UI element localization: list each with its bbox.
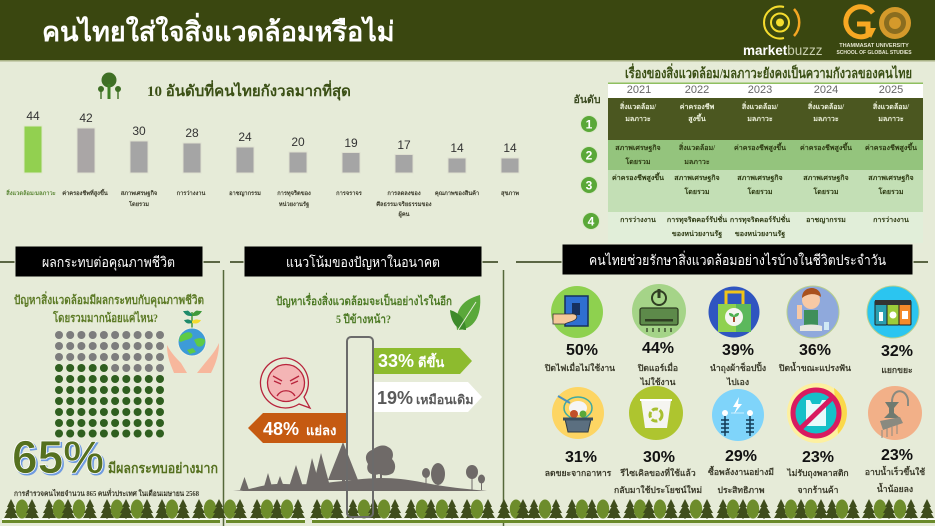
heading: daily actions: คนไทยช่วยรักษาสิ่งแวดล้อมอย่างไรบ้างในชีวิตประจำวัน: [589, 251, 886, 269]
action 3: reusable bag: ไปเอง: [726, 377, 749, 387]
logo: marketbuzzz: marketbuzzz: [743, 43, 823, 58]
question: future trend: ปัญหาเรื่องสิ่งแวดล้อมจะเป็นอย่างไรในอีก: [276, 292, 452, 308]
action 6: reduce food waste: [545, 387, 612, 478]
action 4: brushing teeth: [779, 286, 851, 373]
action 7: recycling: รีไซเคิลของที่ใช้แล้ว: [620, 466, 696, 478]
table: ranking by year: ของหน่วยงานรัฐ: [672, 229, 722, 239]
logo: Thammasat GO: SCHOOL OF GLOBAL STUDIES: [836, 50, 912, 56]
arrow: better 33%: 33%: [378, 351, 414, 371]
table: ranking by year: ค่าครองชีพสูงขึ้น: [800, 141, 852, 153]
table: ranking by year: การทุจริตคอร์รัปชั่น: [667, 214, 727, 224]
action 3: reusable bag: 39%: [722, 342, 754, 359]
action 8: efficient energy: ซื้อพลังงานอย่างมี: [708, 465, 774, 477]
bar chart: top 10 worries: โดยรวม: [128, 200, 149, 208]
action 9: no plastic bags: จากร้านค้า: [798, 485, 839, 495]
action 10: short showers: อาบน้ำเร็วขึ้นใช้: [865, 465, 925, 477]
action 9: no plastic bags: ไม่รับถุงพลาสติก: [786, 468, 849, 479]
action 10: short showers: น้ำน้อยลง: [877, 482, 913, 494]
table: ranking by year: สภาพเศรษฐกิจ: [803, 174, 849, 183]
big number: 65%: 65%: [12, 431, 104, 483]
table: ranking by year: สภาพเศรษฐกิจ: [615, 144, 661, 153]
header band: [0, 0, 935, 62]
table: ranking by year: ค่าครองชีพสูงขึ้น: [734, 141, 786, 153]
bar chart: top 10 worries: ค่าครองชีพที่สูงขึ้น: [62, 188, 108, 198]
table: ranking by year: มลภาวะ: [625, 115, 651, 123]
table: ranking by year: โดยรวม: [877, 187, 904, 196]
table: ranking by year: มลภาวะ: [878, 115, 904, 123]
action 3: reusable bag: [708, 286, 766, 387]
table: ranking by year: สูงขึ้น: [688, 112, 706, 124]
arrow: better 33%: ดีขึ้น: [418, 352, 444, 370]
bar chart: top 10 worries: ผู้คน: [398, 210, 410, 219]
bar chart: top 10 worries: สภาพเศรษฐกิจ: [121, 190, 157, 197]
bar chart: top 10 worries: 42: [79, 111, 93, 125]
action 6: reduce food waste: ลดขยะจากอาหาร: [545, 468, 612, 478]
action 2: air conditioner off: ปิดแอร์เมื่อ: [638, 361, 678, 373]
table: ranking by year: สิ่งแวดล้อม/: [872, 101, 910, 111]
text: big impact: มีผลกระทบอย่างมาก: [108, 461, 218, 477]
rank circles: [580, 116, 600, 230]
bar chart: top 10 worries: การทุจริตของ: [277, 190, 311, 197]
icon: leaf: [450, 295, 480, 330]
bar chart: top 10 worries: 24: [238, 130, 252, 144]
heading: daily actions: [562, 244, 913, 275]
bar chart: top 10 worries: 20: [291, 135, 305, 149]
action 2: air conditioner off: ไม่ใช้งาน: [640, 377, 676, 387]
bar chart: top 10 worries: 14: [503, 141, 517, 155]
table: ranking by year: สิ่งแวดล้อม/: [619, 101, 657, 111]
table: ranking by year: สภาพเศรษฐกิจ: [868, 174, 914, 183]
action 8: efficient energy: [708, 389, 774, 495]
action 10: short showers: [865, 386, 925, 494]
action 5: sorting waste: แยกขยะ: [881, 365, 913, 375]
action 4: brushing teeth: 36%: [799, 342, 831, 359]
table: ranking by year: ค่าครองชีพสูงขึ้น: [612, 171, 664, 183]
section lines: [0, 262, 928, 526]
rank circles: 4: [588, 214, 595, 228]
table: ranking by year: โดยรวม: [624, 157, 651, 166]
bar chart: top 10 worries: 17: [397, 138, 411, 152]
action 5: sorting waste: [867, 286, 919, 375]
bar chart: top 10 worries: 30: [132, 124, 146, 138]
question: quality of life: โดยรวมมากน้อยแค่ไหน?: [52, 310, 158, 325]
action 9: no plastic bags: [786, 383, 849, 495]
table: ranking by year: การทุจริตคอร์รัปชั่น: [730, 214, 790, 224]
bar chart: top 10 worries: 14: [450, 141, 464, 155]
action 8: efficient energy: ประสิทธิภาพ: [718, 485, 765, 495]
table: ranking by year: ของหน่วยงานรัฐ: [735, 229, 785, 239]
icon: trees: [98, 72, 121, 99]
table: ranking by year: 2021: [627, 84, 651, 96]
action 10: short showers: 23%: [881, 447, 913, 464]
bar chart: top 10 worries: การลดลงของ: [387, 190, 421, 197]
action 8: efficient energy: 29%: [725, 448, 757, 465]
table: ranking by year: 2022: [685, 84, 709, 96]
action 5: sorting waste: 32%: [881, 343, 913, 360]
heading: future trend: [244, 246, 482, 277]
bar chart: top 10 worries: คุณภาพของสินค้า: [435, 189, 479, 197]
dot matrix: 65 of 100: [55, 331, 164, 438]
table: ranking by year: ค่าครองชีพ: [680, 102, 715, 111]
thermometer outline: [347, 337, 373, 517]
bar chart: top 10 worries: การว่างงาน: [177, 190, 205, 197]
rank circles: 1: [586, 118, 593, 132]
action 4: brushing teeth: ปิดน้ำขณะแปรงฟัน: [779, 361, 851, 373]
forest strip: panel 2 left: [224, 499, 305, 523]
question: quality of life: [14, 291, 204, 325]
bar chart: top 10 worries: หน่วยงานรัฐ: [279, 201, 309, 208]
table: ranking by year: สภาพเศรษฐกิจ: [674, 174, 720, 183]
heading: quality of life: ผลกระทบต่อคุณภาพชีวิต: [42, 255, 175, 271]
logo: marketbuzzz: [743, 6, 823, 58]
footnote: การสำรวจคนไทยจำนวน 865 คนทั่วประเทศ ในเดือนเมษายน 2568: [14, 487, 199, 498]
table: ranking by year: มลภาวะ: [747, 115, 773, 123]
action 1: lights off: [545, 286, 615, 373]
bar chart: top 10 worries: การจราจร: [336, 190, 363, 197]
table: ranking by year: สิ่งแวดล้อม/: [678, 142, 716, 152]
logo: Thammasat GO: [836, 7, 912, 56]
label: rank: อันดับ: [574, 94, 601, 106]
forest strip: panel 2 right and panel 3: [310, 499, 935, 523]
table: ranking by year: การว่างงาน: [873, 215, 909, 224]
bar chart: top 10 worries: สิ่งแวดล้อม/มลภาวะ: [6, 189, 56, 197]
table: ranking by year: ค่าครองชีพสูงขึ้น: [865, 141, 917, 153]
action 1: lights off: ปิดไฟเมื่อไม่ใช้งาน: [545, 361, 615, 373]
table: ranking by year: สิ่งแวดล้อม/: [807, 101, 845, 111]
action 7: recycling: กลับมาใช้ประโยชน์ใหม่: [614, 484, 702, 495]
table: ranking by year: สภาพเศรษฐกิจ: [737, 174, 783, 183]
table: ranking by year: มลภาวะ: [684, 158, 710, 166]
table: ranking by year: โดยรวม: [812, 187, 839, 196]
arrow: same 19%: เหมือนเดิม: [416, 393, 473, 407]
big number: 65%: 65%: [14, 432, 106, 484]
action 2: air conditioner off: [632, 284, 686, 387]
table: ranking by year: [608, 82, 923, 243]
action 9: no plastic bags: 23%: [802, 449, 834, 466]
heading: future trend: แนวโน้มของปัญหาในอนาคต: [286, 254, 440, 271]
table: ranking by year: 2023: [748, 84, 772, 96]
action 2: air conditioner off: 44%: [642, 340, 674, 357]
bar chart: top 10 worries: สุขภาพ: [501, 190, 519, 197]
arrow: worse 48%: แย่ลง: [306, 423, 336, 438]
action 7: recycling: [614, 386, 702, 495]
icon: hands holding globe: [167, 311, 219, 373]
heading: quality of life: [15, 246, 203, 277]
arrow: worse 48%: [248, 413, 346, 443]
bar chart: top 10 worries: ศีลธรรม/จริยธรรมของ: [376, 201, 432, 208]
grey forest silhouette: [233, 442, 487, 491]
arrow: worse 48%: 48%: [263, 419, 299, 439]
table: ranking by year: อาชญากรรม: [806, 216, 846, 224]
table: ranking by year: โดยรวม: [746, 187, 773, 196]
table: ranking by year: มลภาวะ: [813, 115, 839, 123]
table: ranking by year: 2025: [879, 84, 903, 96]
bar chart: top 10 worries: 44: [26, 109, 40, 123]
rank circles: 3: [586, 178, 593, 192]
arrow: same 19%: 19%: [377, 388, 413, 408]
title: คนไทยใส่ใจสิ่งแวดล้อมหรือไม่: [42, 12, 395, 47]
action 1: lights off: 50%: [566, 342, 598, 359]
table: ranking by year: 2024: [814, 84, 838, 96]
bar chart: top 10 worries: 28: [185, 126, 199, 140]
bar chart: top 10 worries: 19: [344, 136, 358, 150]
action 3: reusable bag: นำถุงผ้าช็อปปิ้ง: [710, 361, 766, 374]
icon: sad face bubble: [260, 358, 310, 408]
question: quality of life: ปัญหาสิ่งแวดล้อมมีผลกระทบกับคุณภาพชีวิต: [14, 291, 204, 308]
heading: top 10 worries: 10 อันดับที่คนไทยกังวลมากที่สุด: [147, 80, 351, 101]
question: future trend: [276, 292, 452, 326]
logo: Thammasat GO: THAMMASAT UNIVERSITY: [839, 43, 909, 49]
rank circles: 2: [586, 148, 593, 162]
bar chart: top 10 worries: อาชญากรรม: [229, 190, 261, 197]
arrow: same 19%: [374, 382, 482, 412]
arrow: better 33%: [374, 348, 472, 374]
table: ranking by year: โดยรวม: [683, 187, 710, 196]
action 7: recycling: 30%: [643, 449, 675, 466]
bar chart: top 10 worries: [6, 109, 519, 219]
table: ranking by year: การว่างงาน: [620, 215, 656, 224]
question: future trend: 5 ปีข้างหน้า?: [336, 313, 391, 326]
forest strip: panel 1: [2, 499, 226, 523]
action 6: reduce food waste: 31%: [565, 449, 597, 466]
table: ranking by year: สิ่งแวดล้อม/: [741, 101, 779, 111]
